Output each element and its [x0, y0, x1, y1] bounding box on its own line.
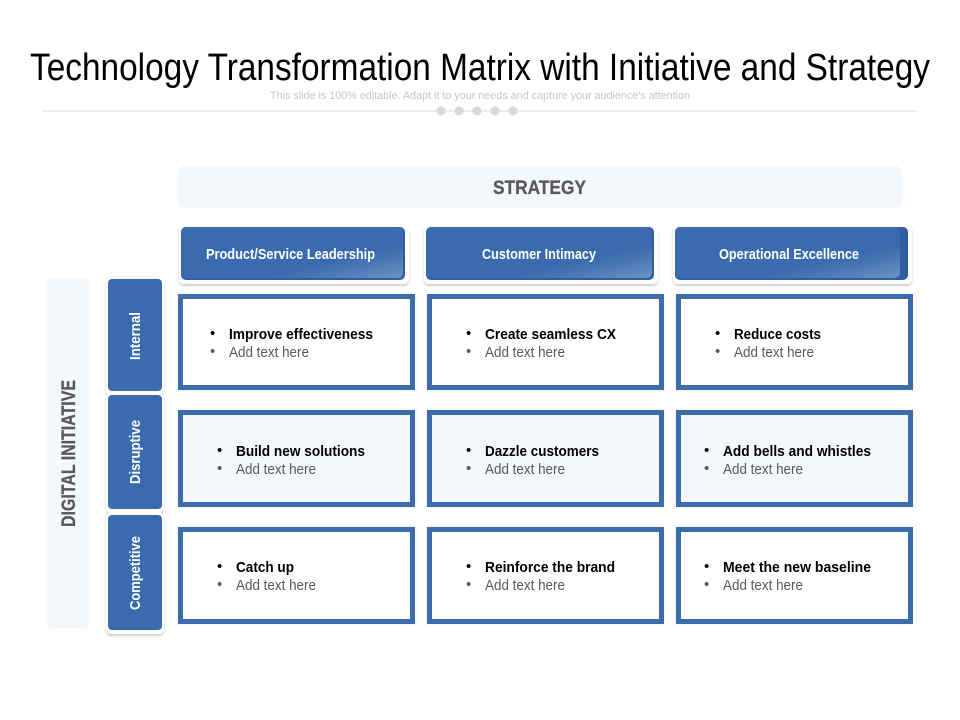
- cell: Meet the new baseline: [678, 530, 910, 622]
- cell: Reinforce the brand: Add text here: [485, 577, 565, 594]
- header: Operational Excellence: Operational Excellence: [719, 247, 859, 263]
- header: Operational Excellence: [673, 225, 912, 284]
- cell: Catch up: •: [217, 558, 222, 575]
- cell: Reduce costs: Add text here: [734, 344, 814, 361]
- cell: Build new solutions: •: [217, 442, 222, 459]
- cell: Improve effectiveness: •: [210, 325, 215, 342]
- cell: Reinforce the brand: [430, 530, 662, 622]
- cell: Reduce costs: Reduce costs: [734, 326, 821, 343]
- cell: Build new solutions: •: [217, 460, 222, 477]
- header: Customer Intimacy: Customer Intimacy: [482, 247, 596, 263]
- cell: Dazzle customers: Add text here: [485, 461, 565, 478]
- tab: Disruptive: Disruptive: [128, 420, 144, 484]
- cell: Add bells and whistles: Add text here: [723, 461, 803, 478]
- cell: Improve effectiveness: [180, 296, 412, 388]
- tab: Internal: [106, 277, 164, 395]
- cell: Reduce costs: •: [715, 343, 720, 360]
- cell: Catch up: Add text here: [236, 577, 316, 594]
- cell: Reinforce the brand: •: [466, 576, 471, 593]
- cell: Build new solutions: Build new solutions: [236, 443, 365, 460]
- cell: Create seamless CX: Add text here: [485, 344, 565, 361]
- cell: Create seamless CX: •: [466, 343, 471, 360]
- tab: Competitive: [106, 513, 164, 634]
- tab: Competitive: Competitive: [128, 536, 144, 610]
- cell: Create seamless CX: Create seamless CX: [485, 326, 616, 343]
- panel: digital initiative band: DIGITAL INITIATIVE: [59, 380, 80, 527]
- panel: strategy band: STRATEGY: [493, 178, 586, 199]
- header: Customer Intimacy: [424, 225, 658, 284]
- cell: Reduce costs: [678, 296, 910, 388]
- column headers: [179, 225, 912, 284]
- header: Product/Service Leadership: Product/Service Leadership: [206, 247, 375, 263]
- cell: Improve effectiveness: Add text here: [229, 344, 309, 361]
- cell: Catch up: •: [217, 576, 222, 593]
- cell: Meet the new baseline: Add text here: [723, 577, 803, 594]
- cell: Meet the new baseline: •: [704, 576, 709, 593]
- cell: Reduce costs: •: [715, 325, 720, 342]
- subtitle: This slide is 100% editable. Adapt it to your needs and capture your audience's attention: [270, 90, 690, 102]
- cell: Add bells and whistles: •: [704, 460, 709, 477]
- cell: Dazzle customers: •: [466, 460, 471, 477]
- cell: Dazzle customers: [430, 412, 662, 504]
- header divider with dots: [42, 106, 917, 116]
- cell: Add bells and whistles: Add bells and whistles: [723, 443, 871, 460]
- row tabs: [106, 277, 164, 634]
- cell: Dazzle customers: Dazzle customers: [485, 443, 599, 460]
- tab: Internal: Internal: [128, 312, 144, 360]
- panel: digital initiative band: [47, 278, 89, 628]
- cell: Meet the new baseline: •: [704, 558, 709, 575]
- cell: Reinforce the brand: •: [466, 558, 471, 575]
- cell: Catch up: Catch up: [236, 559, 294, 576]
- panel: strategy band: [178, 166, 902, 208]
- cell: Catch up: [180, 530, 412, 622]
- cell: Build new solutions: Add text here: [236, 461, 316, 478]
- header: Product/Service Leadership: [179, 225, 409, 284]
- cell: Build new solutions: [180, 412, 412, 504]
- cell: Create seamless CX: •: [466, 325, 471, 342]
- cell: Add bells and whistles: •: [704, 442, 709, 459]
- cell: Meet the new baseline: Meet the new baseline: [723, 559, 871, 576]
- cell: Dazzle customers: •: [466, 442, 471, 459]
- cell: Add bells and whistles: [678, 412, 910, 504]
- cell: Reinforce the brand: Reinforce the brand: [485, 559, 615, 576]
- matrix cells: [180, 296, 910, 622]
- cell: Improve effectiveness: •: [210, 343, 215, 360]
- cell: Improve effectiveness: Improve effectiveness: [229, 326, 373, 343]
- tab: Disruptive: [106, 393, 164, 513]
- cell: Create seamless CX: [430, 296, 662, 388]
